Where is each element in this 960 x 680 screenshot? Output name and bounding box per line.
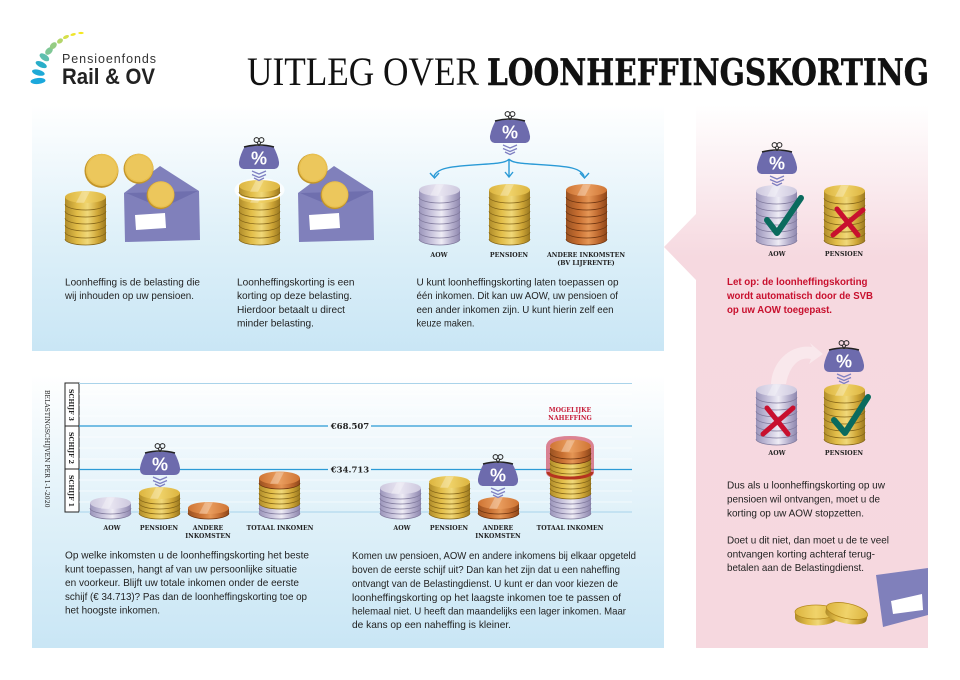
chart: inkomen binnen eerste schijf: TOTAAL INKOMEN: [247, 525, 314, 532]
text: keuze: U kunt loonheffingskorting laten toepassen op: [416, 278, 619, 288]
chart: inkomen boven eerste schijf: AOW: [392, 525, 412, 532]
text: naheffing: de kans op een naheffing is kleiner.: [352, 620, 511, 631]
text: loonheffingskorting: minder belasting.: [237, 318, 314, 330]
text: naheffing: ontvangt van de Belastingdienst. U kunt er dan voor kiezen de: [352, 579, 618, 590]
illustration: korting op AOW: %: [769, 154, 785, 174]
text: naheffing: loonheffingskorting op het laagste inkomen toe te passen of: [352, 593, 621, 604]
illustration: keuze inkomen: AOW: [429, 252, 449, 259]
chart: inkomen boven eerste schijf: [380, 407, 604, 540]
chart: inkomen boven eerste schijf: PENSIOEN: [430, 525, 468, 532]
grenslijnen: [79, 384, 632, 512]
chart: inkomen binnen eerste schijf: %: [152, 454, 168, 474]
illustration: keuze inkomen: ANDERE INKOMSTEN: [546, 252, 625, 259]
chart: inkomen boven eerste schijf: %: [490, 466, 506, 486]
panel: belastingschijven: [32, 375, 664, 648]
text: let op: wordt automatisch door de SVB: [726, 291, 873, 302]
chart axis: belastingschijven: SCHIJF 1: [67, 475, 74, 507]
chart axis: belastingschijven: SCHIJF 3: [67, 389, 74, 421]
text: loonheffing: [64, 278, 200, 302]
chart: inkomen boven eerste schijf: INKOMSTEN: [475, 533, 521, 540]
panel: uitleg boven: [32, 105, 664, 351]
chart: inkomen binnen eerste schijf: [90, 444, 314, 540]
logo: Pensioenfonds Rail & OV: Pensioenfonds: [62, 52, 156, 66]
illustration: munten en envelop: [65, 154, 200, 245]
chart: inkomen boven eerste schijf: ANDERE: [482, 525, 513, 532]
text: stopzetten: [727, 480, 889, 574]
illustration: keuze inkomen: (BV LIJFRENTE): [557, 260, 615, 267]
illustration: keuze inkomen: PENSIOEN: [490, 252, 528, 259]
illustration: korting op pensioen: [756, 341, 868, 457]
text: naheffing: Komen uw pensioen, AOW en andere inkomens bij elkaar opgeteld: [352, 551, 636, 562]
label: 34.713: €34.713: [330, 466, 369, 476]
text: keuze: keuze maken.: [416, 318, 474, 330]
chart: inkomen binnen eerste schijf: ANDERE: [192, 525, 223, 532]
chart: inkomen boven eerste schijf: TOTAAL INKOMEN: [537, 525, 604, 532]
text: let op: op uw AOW toegepast.: [727, 305, 832, 316]
illustration: korting op munten: [234, 138, 374, 245]
illustration: korting op pensioen: AOW: [767, 450, 787, 457]
illustration: munten en envelop onder: [795, 568, 928, 628]
text: stopzetten: Doet u dit niet, dan moet u de te veel: [727, 536, 889, 546]
illustration: korting op AOW: PENSIOEN: [825, 251, 863, 258]
illustration: korting op munten: %: [251, 148, 267, 168]
text: welke inkomsten: en voorkeur. Blijft uw totale inkomen onder de eerste: [65, 578, 299, 589]
illustration: korting op pensioen: %: [836, 352, 852, 372]
text: welke inkomsten: Op welke inkomsten u de loonheffingskorting het beste: [65, 550, 309, 562]
text: welke inkomsten: het hoogste inkomen.: [65, 606, 160, 616]
chart: inkomen boven eerste schijf: NAHEFFING: [548, 415, 592, 422]
text: naheffing: boven de eerste schijf uit? Dan kan het zijn dat u een naheffing: [352, 565, 620, 576]
text: loonheffingskorting: Loonheffingskorting is een: [237, 278, 354, 288]
illustration: korting op pensioen: PENSIOEN: [825, 450, 863, 457]
chart axis: belastingschijven: BELASTINGSCHIJVEN PER 1-1-2020: [43, 390, 50, 508]
text: stopzetten: ontvangen korting achteraf terug-: [727, 550, 875, 560]
text: stopzetten: pensioen wil ontvangen, moet u de: [727, 494, 880, 506]
text: let op: Let op: de loonheffingskorting: [727, 277, 868, 288]
text: loonheffingskorting: Hierdoor betaalt u direct: [237, 305, 345, 316]
chart: inkomen binnen eerste schijf: INKOMSTEN: [185, 533, 231, 540]
panel: let op: [664, 105, 928, 648]
text: keuze: een ander inkomen zijn. U kunt hierin zelf een: [416, 305, 614, 316]
text: naheffing: helemaal niet. U heeft dan maandelijks een lager inkomen. Maar: [352, 606, 627, 618]
text: welke inkomsten: [65, 550, 309, 616]
logo: Pensioenfonds Rail & OV: Rail & OV: [62, 64, 155, 89]
illustration: keuze inkomen: [419, 112, 625, 267]
illustration: korting op AOW: [756, 143, 865, 258]
illustration: keuze inkomen: %: [502, 122, 518, 142]
text: loonheffingskorting: korting op deze belasting.: [237, 291, 352, 302]
text: stopzetten: korting op uw AOW stopzetten.: [727, 508, 864, 520]
chart axis: belastingschijven: SCHIJF 2: [67, 432, 74, 464]
chart: inkomen boven eerste schijf: MOGELIJKE: [549, 407, 592, 414]
text: welke inkomsten: kunt toepassen, hangt af van uw persoonlijke situatie: [65, 564, 297, 576]
text: naheffing: [352, 551, 636, 631]
text: stopzetten: betalen aan de Belastingdienst.: [727, 563, 864, 574]
title: UITLEG OVER: [247, 49, 479, 94]
chart: inkomen binnen eerste schijf: AOW: [102, 525, 122, 532]
label: 68.507: €68.507: [330, 422, 369, 432]
illustration: korting op AOW: AOW: [767, 251, 787, 258]
text: loonheffing: wij inhouden op uw pensioen.: [64, 291, 194, 302]
text: loonheffingskorting: [237, 278, 354, 330]
chart axis: belastingschijven: [43, 383, 79, 512]
text: let op: [726, 277, 873, 316]
text: keuze: [416, 278, 619, 330]
text: welke inkomsten: schijf (€ 34.713)? Pas dan de loonheffingskorting toe op: [65, 592, 307, 603]
logo: Pensioenfonds Rail & OV: [30, 32, 156, 89]
text: loonheffing: Loonheffing is de belasting die: [65, 278, 200, 288]
text: keuze: één inkomen. Dit kan uw AOW, uw pensioen of: [416, 291, 618, 302]
chart: inkomen binnen eerste schijf: PENSIOEN: [140, 525, 178, 532]
text: stopzetten: Dus als u loonheffingskorting op uw: [727, 480, 886, 492]
